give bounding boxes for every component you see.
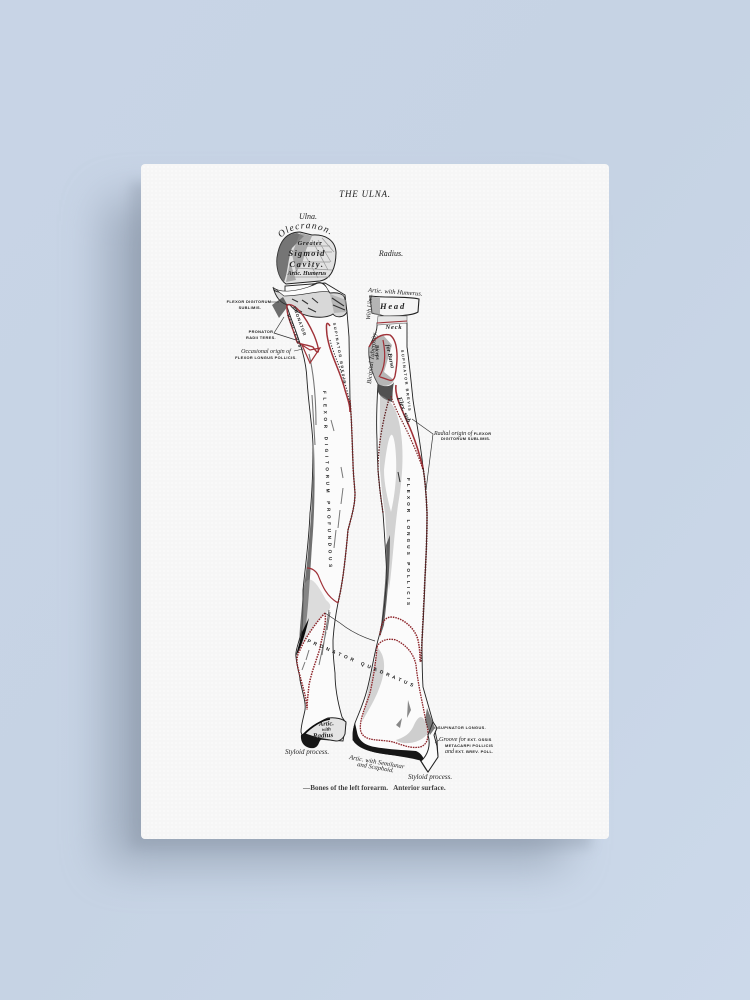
label: Greater Sigmoid Cavity: Greater [298, 240, 322, 247]
callouts right: DIGITORUM SUBLIMIS. [441, 436, 491, 441]
labels on bones: Artic. Humerus [287, 271, 327, 277]
supinator brevis outline on radius [396, 385, 423, 468]
label: Bursa: for Bursa [384, 344, 395, 369]
ulna distal articular end [302, 718, 346, 741]
label: Artic with Humerus: Artic. with Humerus. [367, 287, 423, 298]
canvas cast shadow [105, 182, 591, 865]
radius head [370, 296, 419, 316]
callouts left [227, 299, 303, 360]
distal radius dark articular rim [353, 723, 427, 771]
biceps outline [369, 335, 397, 380]
coronoid process [273, 283, 347, 317]
canvas panel [141, 164, 609, 839]
label: Flexor sublimis: Flex. sub. [395, 396, 413, 425]
caption: Styloid process ulna: Styloid process. [285, 748, 329, 756]
dotted flexor border [338, 400, 355, 603]
label: Supinator Brevis radius: SUPINATOR BREVIS [400, 350, 412, 412]
label: Supinator Brevis ulna: SUPINATOR BREVIS [332, 322, 347, 385]
bicipital tuberosity [369, 335, 394, 386]
labels on bones: Radius [312, 731, 334, 740]
label: Olecranon: Olecranon. [278, 224, 330, 236]
label: Ulna: Ulna. [299, 212, 317, 221]
ulna left shaft shading [299, 447, 315, 645]
callout: Groove: Groove for EXT. OSSIS [439, 736, 492, 743]
radius styloid [421, 722, 438, 772]
labels on bones: Cavity. [289, 259, 325, 269]
title: THE ULNA. [339, 189, 391, 199]
label: Pronator Quadratus: PRONATOR QUADRATUS [306, 638, 417, 690]
label: Flexor Longus Pollicis: FLEXOR LONGUS POLLICIS [406, 478, 411, 608]
radius shaft [353, 323, 438, 772]
radius lower shading [362, 648, 384, 722]
callout: Pronator Radii Teres: PRONATOR [249, 329, 273, 334]
callouts left: RADII TERES. [246, 335, 276, 340]
pronator quadratus lower outline [360, 639, 428, 747]
caption: Artic with Semilunar and Scaphoid: Artic. with Semilunar [348, 754, 405, 771]
bone: ulna [272, 232, 355, 748]
olecranon head [277, 232, 336, 284]
ulna styloid shadow [301, 733, 322, 748]
dotted border left [378, 399, 389, 513]
radius central shading [378, 382, 394, 402]
connector: interosseous line [325, 613, 375, 641]
label: Bicipital Tuberosity: Bicipital Tuberosity. [366, 331, 379, 384]
labels on bones: RADII TERES [286, 314, 303, 349]
callouts left: FLEXOR LONGUS POLLICIS. [235, 355, 297, 360]
callouts right: and EXT. BREV. POLL. [445, 749, 494, 755]
callouts right: METACARPI POLLICIS [445, 743, 493, 748]
callout: Flexor Digitorum Sublimis: FLEXOR DIGITORUM [227, 299, 271, 304]
callout: Supinator Longus: SUPINATOR LONGUS. [438, 725, 486, 730]
pronator quadratus outline on ulna [307, 568, 338, 603]
caption: figure note: —Bones of the left forearm. Anterior surface. [302, 784, 446, 792]
label: Artic with Radius: Artic. [318, 720, 334, 728]
muscle outline: pronator radii teres [287, 305, 318, 352]
callout: Radial origin: Radial origin of FLEXOR [433, 430, 491, 437]
bottom captions: and Scaphoid. [357, 761, 395, 774]
labels on bones: with [322, 728, 331, 733]
label: Flexor Digitorum Profundous: FLEXOR DIGITORUM PROFUNDOUS [322, 391, 333, 571]
radius neck [377, 316, 407, 325]
ulna hatch marks [302, 420, 343, 670]
pronator quadratus upper arc [380, 617, 420, 662]
labels on bones: Sigmoid [288, 248, 326, 258]
bone: radius [353, 296, 438, 772]
dotted border right [421, 468, 427, 662]
labels on bones [278, 212, 423, 740]
bottom captions [285, 748, 452, 792]
ulna shaft [285, 283, 355, 741]
label: Head: Head [379, 301, 406, 311]
muscle outline: supinator brevis [326, 323, 350, 412]
label: Pronator Radii Teres: PRONATOR [292, 306, 308, 337]
label: Radius: Radius. [378, 249, 403, 258]
label: With Ulna: With Ulna. [366, 294, 374, 320]
callouts left: SUBLIMIS. [239, 305, 261, 310]
anatomical plate [226, 189, 494, 792]
label: Neck: Neck [385, 324, 402, 331]
muscle outline: occasional origin [302, 345, 320, 363]
caption: Styloid process radius: Styloid process. [408, 773, 452, 781]
label: Biceps: Biceps [373, 344, 380, 360]
callout: Occasional origin: Occasional origin of [241, 348, 292, 355]
callouts right [412, 419, 494, 755]
